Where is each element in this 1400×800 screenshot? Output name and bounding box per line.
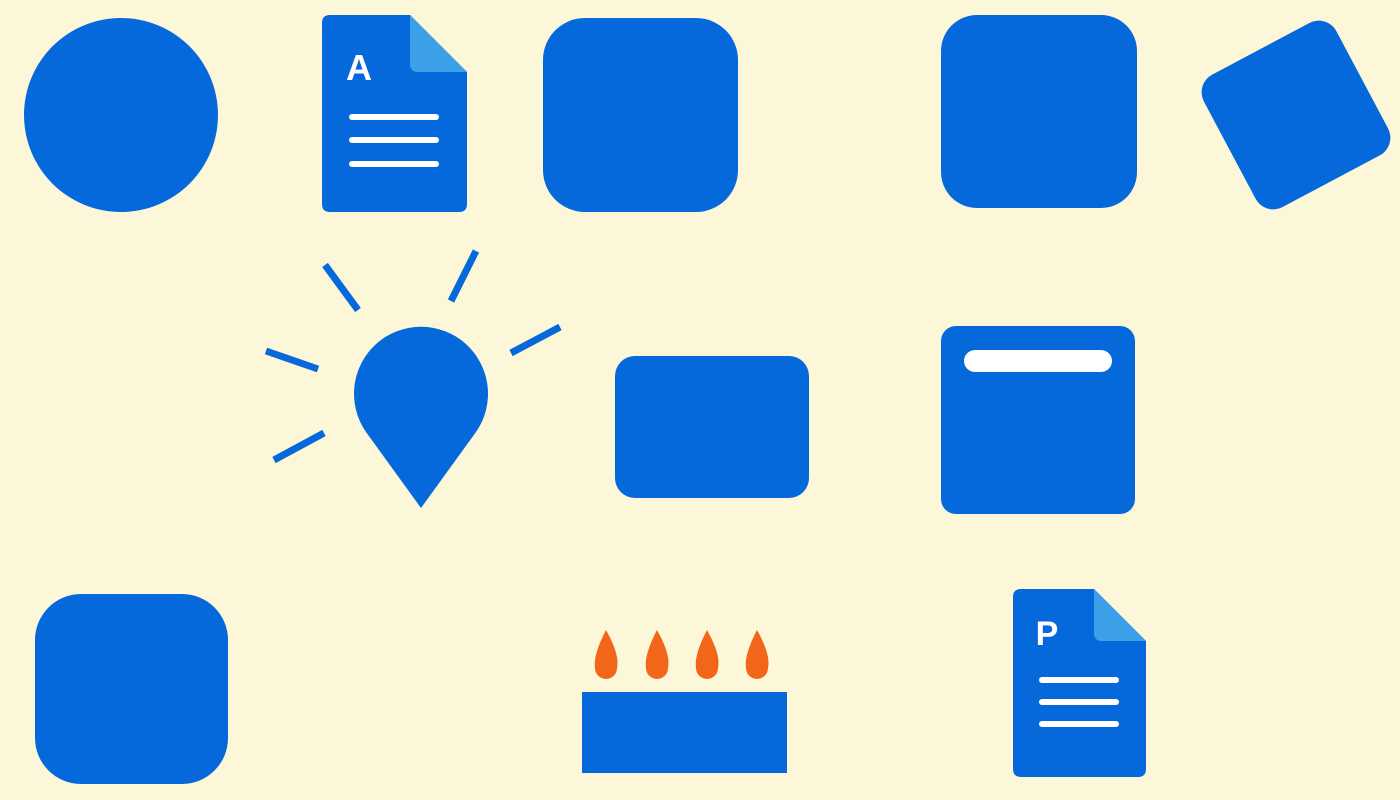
icon: circle xyxy=(24,18,218,212)
icon: cake with flames xyxy=(582,630,787,773)
icon: rounded square top middle xyxy=(543,18,738,212)
icon: lightbulb pin with rays xyxy=(266,251,560,508)
icon: document A: A xyxy=(346,47,372,88)
icon: rounded square bottom left xyxy=(35,594,228,784)
icon: rotated square xyxy=(1195,14,1397,216)
icon: document P xyxy=(1013,589,1146,777)
icon: rounded square top right xyxy=(941,15,1137,208)
icon: document P: P xyxy=(1036,615,1058,653)
icon: window xyxy=(941,326,1135,514)
icon: document A xyxy=(322,15,467,212)
icon: rectangle center xyxy=(615,356,809,498)
